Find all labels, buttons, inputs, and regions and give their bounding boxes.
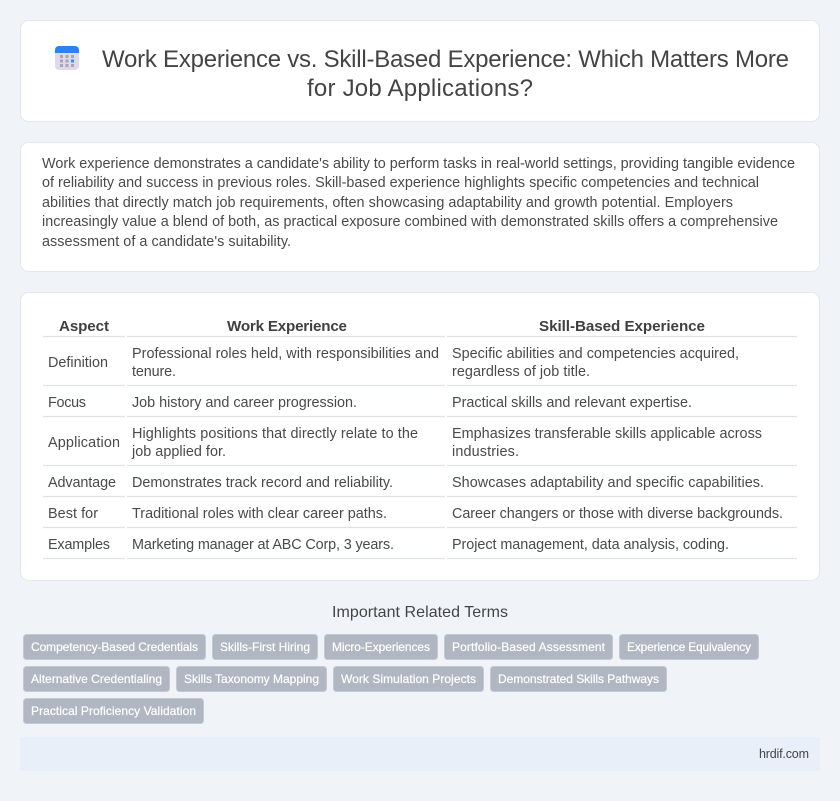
text block: introduction: Work experience demonstrates a candidate's ability to perform tasks in real-world settings, providing tangible evidence xyxy=(42,156,795,172)
icon: calendar xyxy=(55,46,79,70)
tag: Skills Taxonomy Mapping xyxy=(184,672,319,686)
tag xyxy=(24,666,170,692)
tag xyxy=(212,634,318,660)
tag xyxy=(620,634,758,660)
row: application: industries. xyxy=(452,444,519,460)
row: advantage: Showcases adaptability and specific capabilities. xyxy=(452,475,764,491)
tag xyxy=(490,666,666,692)
row: advantage: Demonstrates track record and reliability. xyxy=(132,475,393,491)
row: application: job applied for. xyxy=(131,444,226,460)
text block: introduction: increasingly value a blend of both, as practical exposure combined with demonstrated skills offers a comprehensive xyxy=(42,214,778,230)
text block: introduction: assessment of a candidate's suitability. xyxy=(42,234,291,250)
panel: intro text xyxy=(20,142,820,272)
tag: Competency-Based Credentials xyxy=(31,640,198,654)
row: application: Highlights positions that directly relate to the xyxy=(132,426,418,442)
title: for Job Applications? xyxy=(307,75,533,102)
table header: Aspect xyxy=(59,318,109,335)
footer: hrdif.com xyxy=(759,747,809,761)
tag: Micro-Experiences xyxy=(332,640,430,654)
row: best for: Traditional roles with clear career paths. xyxy=(132,506,387,522)
row: focus: Practical skills and relevant expertise. xyxy=(452,395,692,411)
row: definition xyxy=(48,346,739,380)
row: advantage: Advantage xyxy=(48,475,116,491)
panel: header xyxy=(20,20,820,122)
footer xyxy=(20,737,820,771)
text block: introduction: of reliability and success in previous roles. Skill-based experience highlights specific competencies and technical xyxy=(42,175,759,191)
tag: Portfolio-Based Assessment xyxy=(452,640,606,654)
tag: Practical Proficiency Validation xyxy=(31,704,196,718)
table header: Work Experience xyxy=(227,318,347,335)
title xyxy=(102,46,789,102)
row: application: Emphasizes transferable skills applicable across xyxy=(452,426,762,442)
tag: Demonstrated Skills Pathways xyxy=(498,672,659,686)
row: focus: Focus xyxy=(48,395,86,411)
row: best for xyxy=(48,506,783,522)
title: Work Experience vs. Skill-Based Experience: Which Matters More xyxy=(102,46,789,73)
tag: Alternative Credentialing xyxy=(31,672,162,686)
row: definition: tenure. xyxy=(132,364,176,380)
row: definition: Specific abilities and competencies acquired, xyxy=(452,346,739,362)
tag xyxy=(444,634,612,660)
tag: Work Simulation Projects xyxy=(341,672,476,686)
tag: Skills-First Hiring xyxy=(220,640,310,654)
tag group: related terms xyxy=(24,634,758,724)
tag xyxy=(24,634,206,660)
row: focus: Job history and career progression. xyxy=(132,395,357,411)
row: examples: Marketing manager at ABC Corp, 3 years. xyxy=(132,537,394,553)
tag xyxy=(176,666,326,692)
row: definition: regardless of job title. xyxy=(452,364,590,380)
tag xyxy=(324,634,438,660)
tag xyxy=(24,698,204,724)
row: focus xyxy=(48,395,692,411)
tag: Experience Equivalency xyxy=(627,640,751,654)
text block: introduction: abilities that directly match job requirements, often showcasing adaptability and growth potential. Employers xyxy=(42,195,733,211)
row: application: Application xyxy=(48,435,120,451)
table header: Skill-Based Experience xyxy=(539,318,705,335)
row: definition: Definition xyxy=(48,355,108,371)
row: advantage xyxy=(48,475,764,491)
panel: comparison table xyxy=(20,292,820,580)
row: application xyxy=(48,426,762,460)
text block: introduction xyxy=(42,156,795,250)
row: best for: Career changers or those with diverse backgrounds. xyxy=(452,506,783,522)
tag xyxy=(334,666,484,692)
row: definition: Professional roles held, with responsibilities and xyxy=(132,346,439,362)
heading: related terms: Important Related Terms xyxy=(332,604,508,621)
row: examples: Examples xyxy=(48,537,110,553)
row: examples xyxy=(48,537,729,553)
row: best for: Best for xyxy=(48,506,98,522)
row: examples: Project management, data analysis, coding. xyxy=(452,537,729,553)
table header xyxy=(59,318,705,335)
